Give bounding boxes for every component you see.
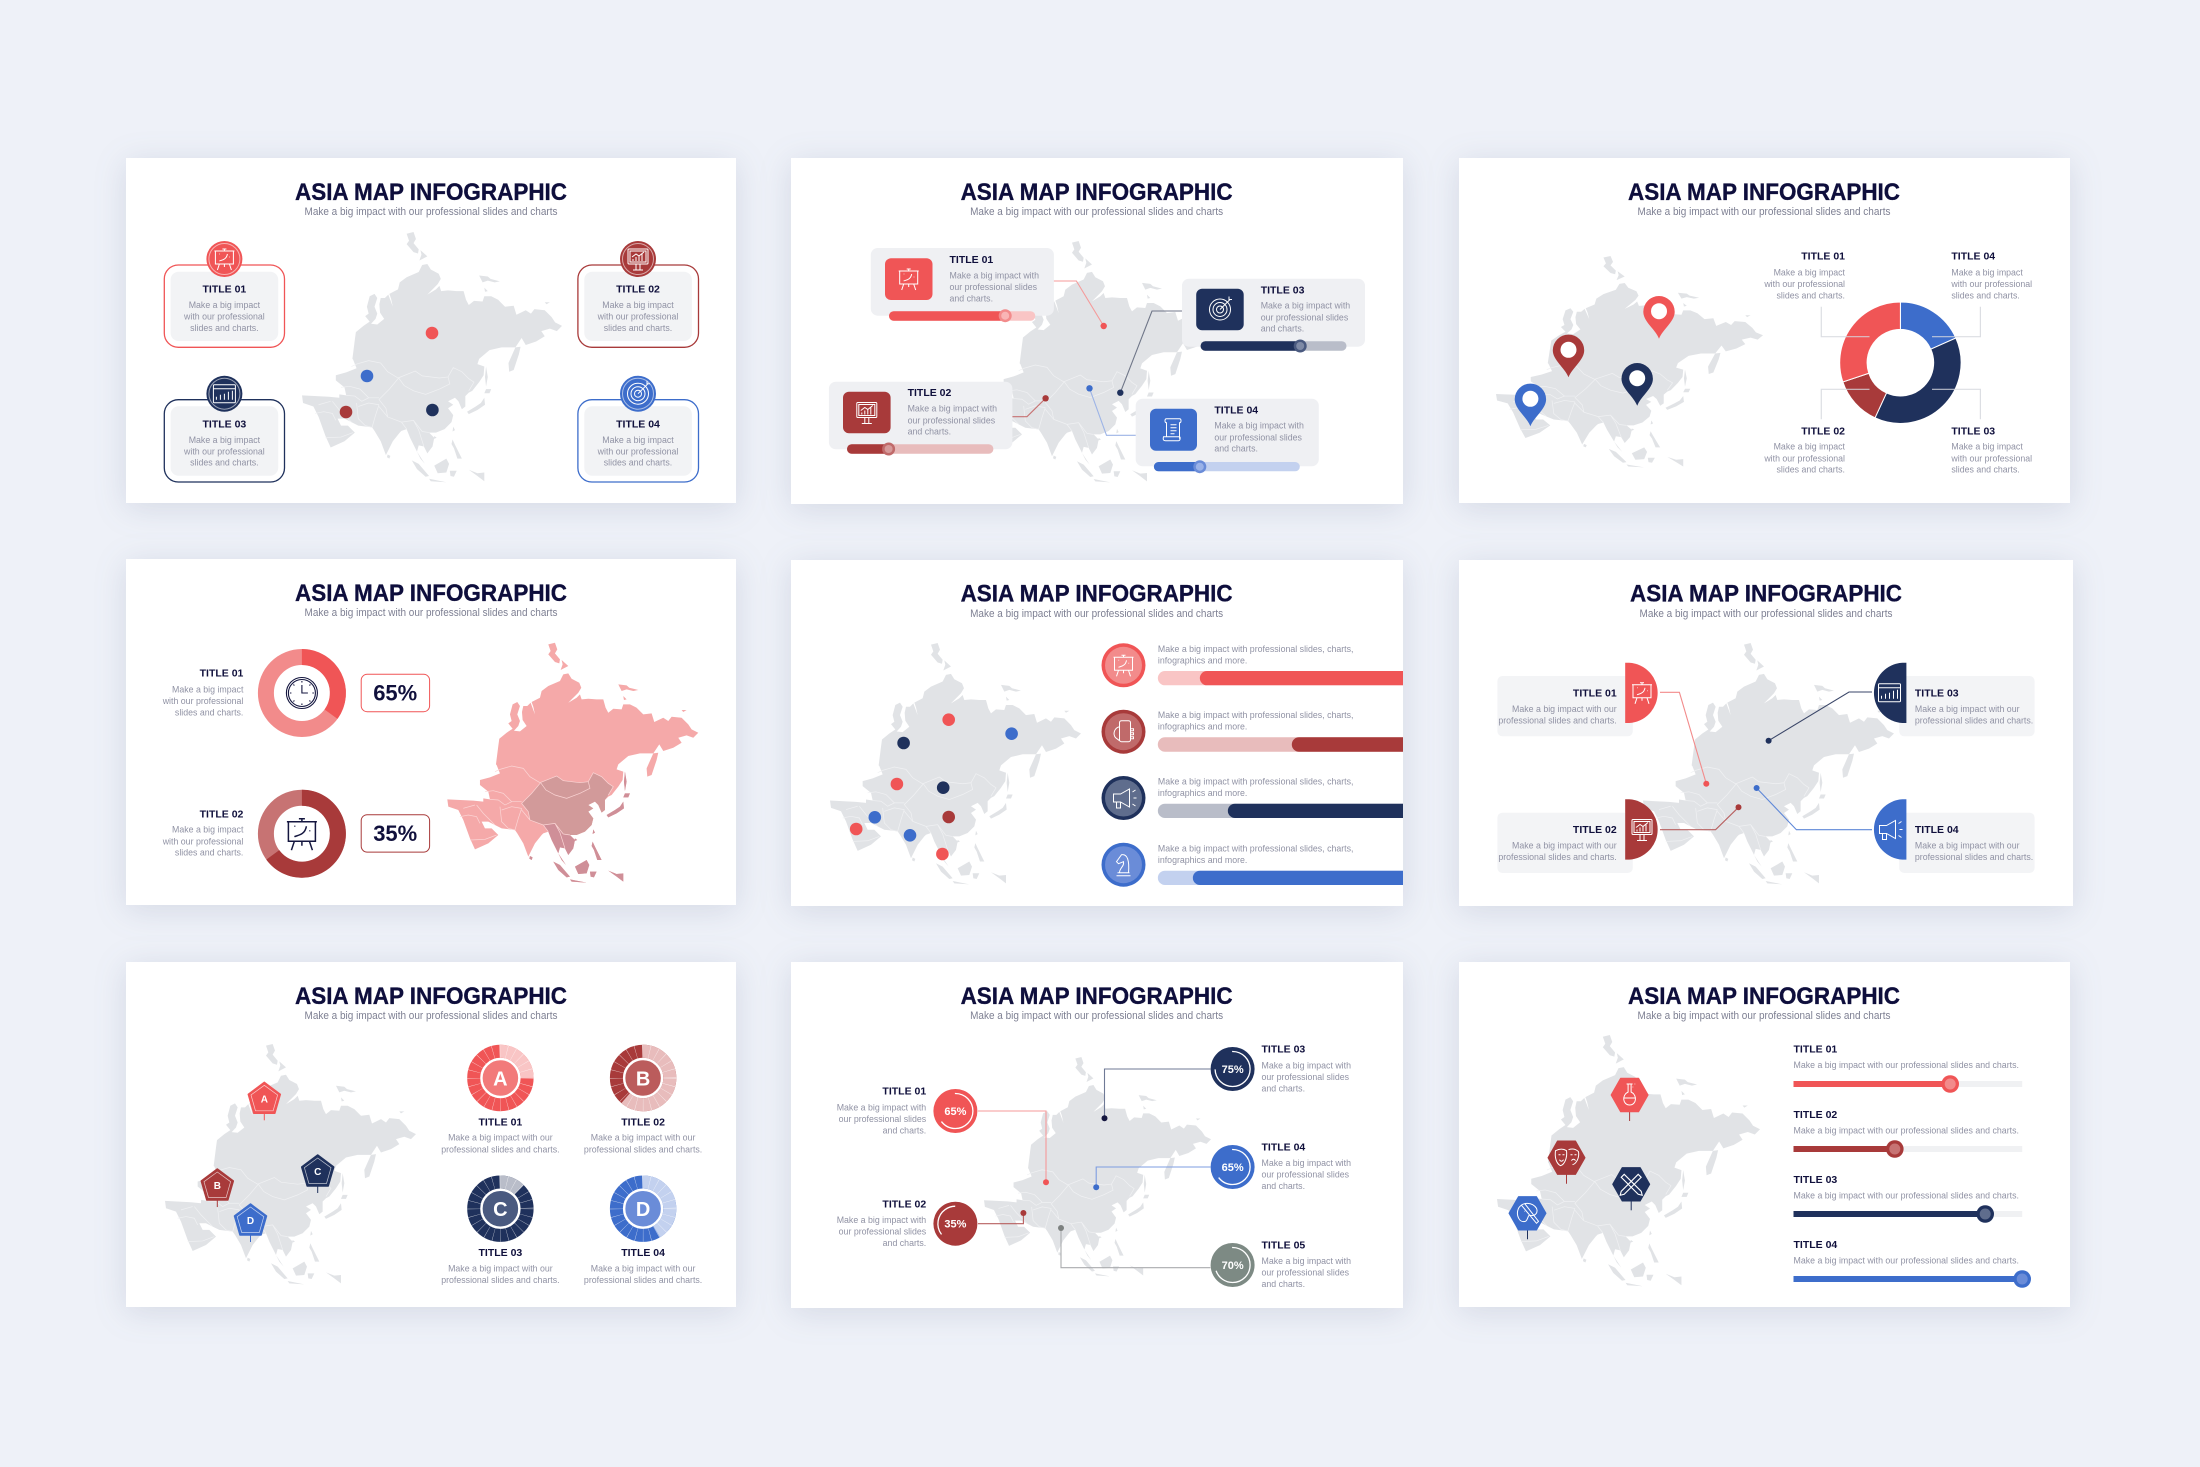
card: title 04: [1136, 399, 1319, 473]
text: title 02: TITLE 02: [200, 808, 244, 820]
text: title 01: [1763, 251, 1846, 300]
pentagon marker B: [201, 1169, 233, 1207]
callout 35 percent: and charts.: [883, 1238, 926, 1248]
card: title 04: our professional slides: [1214, 432, 1303, 442]
card: title 01: TITLE 01: [203, 284, 246, 296]
callout: title 04: professional slides and charts.: [1915, 852, 2033, 862]
text: title 01: TITLE 01: [1801, 251, 1845, 263]
callout 65 percent: and charts.: [883, 1125, 926, 1135]
text: title 01: [162, 668, 244, 717]
text: title 04: TITLE 04: [621, 1247, 665, 1259]
callout 65 percent: [837, 1086, 977, 1135]
text: title 03: slides and charts.: [1951, 465, 2020, 475]
heading: [1630, 582, 1902, 620]
pentagon marker D: [234, 1204, 266, 1242]
heading: Make a big impact with our professional slides and charts: [970, 608, 1224, 620]
panel 6: map with half-circle callouts: [1459, 560, 2073, 906]
card: title 02: [578, 241, 698, 347]
heading: [1628, 984, 1900, 1022]
heading: Make a big impact with our professional slides and charts: [970, 206, 1224, 218]
row 1: infographics and more.: [1158, 656, 1247, 666]
text: title 02: [584, 1116, 702, 1154]
panel 3: map with pins and donut chart: [1459, 158, 2070, 503]
radial gauge A: [474, 1051, 527, 1105]
card: title 03: with our professional: [183, 446, 265, 456]
card: title 03: [1182, 279, 1365, 352]
text: title 04: with our professional: [1950, 279, 2032, 289]
slider: title 04: Make a big impact with our professional slides and charts.: [1794, 1255, 2019, 1265]
text: title 02: with our professional: [1763, 453, 1845, 463]
asia map: [302, 232, 562, 482]
row 4: [1102, 843, 1403, 887]
card: title 02: and charts.: [908, 427, 951, 437]
text: title 04: Make a big impact: [1951, 267, 2023, 277]
slider: title 02: Make a big impact with our professional slides and charts.: [1794, 1125, 2019, 1135]
text: title 02: TITLE 02: [1801, 425, 1845, 437]
heading: [961, 984, 1233, 1022]
panel 4: pink map with percentage donuts: [126, 559, 736, 905]
hexagon marker: masks: [1548, 1141, 1585, 1184]
callout 65 percent blue: 65%: [1222, 1162, 1244, 1174]
pentagon marker A: A: [261, 1094, 268, 1105]
callout 65 percent blue: and charts.: [1262, 1181, 1305, 1191]
panel 7: map with pentagon markers and radial gauges: [126, 962, 736, 1307]
card: title 03: [164, 376, 284, 482]
callout 35 percent: TITLE 02: [882, 1198, 926, 1210]
card: title 03: Make a big impact: [189, 435, 261, 445]
connector lines and dots: [1011, 281, 1183, 435]
card: title 02: Make a big impact with: [908, 404, 997, 414]
callout 75 percent: and charts.: [1262, 1083, 1305, 1093]
row 3: Make a big impact with professional slides, charts,: [1158, 776, 1353, 786]
card: title 04: with our professional: [597, 446, 678, 456]
callout 70 percent: [1211, 1239, 1351, 1289]
text: title 03: [441, 1247, 560, 1285]
text: title 02: slides and charts.: [1777, 465, 1845, 475]
donut leader lines: [1821, 307, 1980, 419]
pentagon marker A: [248, 1082, 280, 1120]
pentagon marker B: B: [214, 1181, 221, 1192]
slider: title 04: TITLE 04: [1794, 1239, 1837, 1251]
slider: title 02: TITLE 02: [1794, 1109, 1837, 1121]
text: title 03: TITLE 03: [1951, 425, 1995, 437]
heading: ASIA MAP INFOGRAPHIC: [961, 180, 1233, 206]
radial gauge D: [616, 1182, 670, 1235]
slider: title 02: [1794, 1109, 2022, 1158]
callout: title 02: professional slides and charts.: [1498, 852, 1617, 862]
card: title 01: Make a big impact: [189, 300, 261, 310]
callout 35 percent: 35%: [944, 1219, 967, 1231]
callout 70 percent: and charts.: [1262, 1279, 1305, 1289]
panel 2: map with slider cards: [791, 158, 1403, 504]
card: title 01: and charts.: [950, 293, 993, 303]
callout 65 percent blue: TITLE 04: [1262, 1142, 1305, 1154]
slider: title 04: [1794, 1239, 2031, 1288]
text: title 03: Make a big impact with our: [448, 1263, 553, 1273]
card: title 03: Make a big impact with: [1261, 301, 1350, 311]
donut 65 percent: [266, 649, 346, 729]
card: title 02: with our professional: [597, 311, 678, 321]
card: title 04: [578, 376, 698, 482]
text: title 01: with our professional: [1763, 279, 1845, 289]
heading: [1628, 180, 1900, 218]
callout: title 04: Make a big impact with our: [1915, 841, 2020, 851]
row 3: infographics and more.: [1158, 788, 1247, 798]
pentagon marker C: [302, 1155, 334, 1193]
callout 75 percent: our professional slides: [1262, 1072, 1350, 1082]
asia map: [984, 1057, 1211, 1276]
card: title 01: Make a big impact with: [950, 270, 1039, 280]
card: title 04: Make a big impact: [602, 435, 674, 445]
callout: title 03: professional slides and charts.: [1915, 716, 2033, 726]
row 4: Make a big impact with professional slides, charts,: [1158, 843, 1353, 853]
card: title 04: slides and charts.: [604, 458, 672, 468]
card: title 02: slides and charts.: [604, 323, 672, 333]
callout: title 02: TITLE 02: [1573, 824, 1617, 836]
panel 1: map with four title cards: [126, 158, 736, 503]
callout: title 03: TITLE 03: [1915, 687, 1959, 699]
heading: [295, 180, 567, 218]
text: title 03: TITLE 03: [479, 1247, 522, 1259]
callout: title 04: TITLE 04: [1915, 824, 1959, 836]
value box 65 percent: 65%: [373, 681, 417, 706]
slider: title 03: [1794, 1174, 2022, 1223]
card: title 03: our professional slides: [1261, 312, 1349, 322]
text: title 04: Make a big impact with our: [591, 1263, 695, 1273]
panel 9: map with hexagon markers and sliders: [1459, 962, 2070, 1307]
heading: Make a big impact with our professional slides and charts: [304, 206, 558, 218]
heading: ASIA MAP INFOGRAPHIC: [295, 581, 567, 607]
asia map: [971, 241, 1222, 482]
heading: [961, 180, 1233, 218]
text: title 02: [1763, 425, 1846, 475]
callout 65 percent: Make a big impact with: [837, 1102, 926, 1112]
row 2: [1102, 710, 1403, 754]
map dots: [850, 713, 1018, 860]
asia map: [1643, 643, 1894, 884]
slider: title 03: TITLE 03: [1794, 1174, 1837, 1186]
heading: Make a big impact with our professional slides and charts: [1638, 1010, 1891, 1022]
card: title 04: Make a big impact with: [1214, 421, 1304, 431]
callout: title 01: professional slides and charts.: [1498, 716, 1617, 726]
pentagon marker D: D: [247, 1216, 254, 1227]
callout: title 02: [1497, 799, 1658, 873]
callout 70 percent: TITLE 05: [1262, 1239, 1305, 1251]
hexagon marker: pencils: [1613, 1168, 1650, 1210]
heading: ASIA MAP INFOGRAPHIC: [295, 984, 567, 1010]
asia map: [830, 643, 1081, 884]
card: title 01: [871, 248, 1054, 322]
text: title 01: with our professional: [162, 696, 243, 706]
connector lines and dots: [1660, 692, 1872, 830]
text: title 01: slides and charts.: [1777, 290, 1845, 300]
panel 5: map with dots and progress rows: [791, 560, 1403, 906]
value box 35 percent: 35%: [373, 821, 417, 846]
card: title 01: our professional slides: [950, 282, 1038, 292]
heading: ASIA MAP INFOGRAPHIC: [1628, 984, 1900, 1010]
hexagon marker: palette: [1509, 1197, 1546, 1239]
radial gauge B: [616, 1051, 670, 1105]
text: title 01: TITLE 01: [200, 668, 244, 680]
card: title 04: TITLE 04: [1214, 404, 1258, 416]
text: title 04: [1950, 251, 2032, 300]
map pins: [1515, 296, 1675, 426]
card: title 03: and charts.: [1261, 324, 1304, 334]
map dots: [340, 327, 439, 418]
text: title 02: Make a big impact: [172, 825, 244, 835]
heading: Make a big impact with our professional slides and charts: [304, 1010, 558, 1022]
slider: title 03: Make a big impact with our professional slides and charts.: [1794, 1190, 2019, 1200]
heading: [961, 582, 1233, 620]
callout 35 percent: our professional slides: [839, 1227, 927, 1237]
text: title 02: slides and charts.: [175, 848, 243, 858]
text: title 02: Make a big impact with our: [591, 1133, 695, 1143]
panel 8: map with percentage callouts: [791, 962, 1403, 1308]
text: title 02: TITLE 02: [621, 1116, 665, 1128]
callout 70 percent: 70%: [1222, 1260, 1244, 1272]
callout 65 percent: our professional slides: [839, 1114, 927, 1124]
connector lines and dots: [978, 1069, 1210, 1268]
slider: title 01: Make a big impact with our professional slides and charts.: [1794, 1060, 2019, 1070]
text: title 01: Make a big impact with our: [448, 1133, 553, 1143]
card: title 02: our professional slides: [908, 415, 996, 425]
row 2: Make a big impact with professional slides, charts,: [1158, 710, 1353, 720]
heading: ASIA MAP INFOGRAPHIC: [1628, 180, 1900, 206]
callout: title 04: [1874, 799, 2035, 873]
card: title 01: with our professional: [183, 311, 265, 321]
text: title 01: [441, 1116, 560, 1154]
card: title 03: TITLE 03: [203, 419, 246, 431]
radial gauge A: A: [493, 1068, 508, 1090]
slider: title 01: [1794, 1044, 2022, 1093]
text: title 04: TITLE 04: [1951, 251, 1995, 263]
text: title 04: [584, 1247, 702, 1285]
text: title 02: with our professional: [162, 836, 243, 846]
text: title 03: [1950, 425, 2032, 475]
donut chart: [1840, 302, 1961, 423]
callout 75 percent: TITLE 03: [1262, 1044, 1305, 1056]
heading: [295, 984, 567, 1022]
text: title 04: slides and charts.: [1951, 290, 2020, 300]
callout: title 03: Make a big impact with our: [1915, 704, 2020, 714]
text: title 01: Make a big impact: [172, 684, 244, 694]
card: title 03: slides and charts.: [190, 458, 259, 468]
card: title 04: and charts.: [1214, 444, 1258, 454]
text: title 02: [162, 808, 244, 858]
callout 35 percent: Make a big impact with: [837, 1215, 926, 1225]
callout: title 03: [1874, 663, 2035, 736]
callout: title 01: TITLE 01: [1573, 687, 1617, 699]
card: title 02: [829, 382, 1012, 456]
heading: Make a big impact with our professional slides and charts: [1640, 608, 1893, 620]
callout 65 percent blue: our professional slides: [1262, 1170, 1350, 1180]
asia map: [1497, 1035, 1760, 1286]
asia map: [1496, 256, 1763, 467]
pentagon marker C: C: [314, 1167, 321, 1178]
card: title 01: TITLE 01: [950, 254, 993, 266]
radial gauge C: C: [493, 1199, 508, 1221]
heading: ASIA MAP INFOGRAPHIC: [1630, 582, 1902, 608]
text: title 03: Make a big impact: [1951, 442, 2023, 452]
text: title 01: Make a big impact: [1774, 267, 1846, 277]
heading: ASIA MAP INFOGRAPHIC: [961, 984, 1233, 1010]
radial gauge C: [474, 1182, 527, 1235]
callout 65 percent: TITLE 01: [882, 1086, 926, 1098]
text: title 02: Make a big impact: [1774, 442, 1846, 452]
radial gauge D: D: [636, 1199, 650, 1221]
card: title 02: TITLE 02: [616, 284, 660, 296]
callout: title 01: [1497, 663, 1658, 736]
heading: Make a big impact with our professional slides and charts: [970, 1010, 1224, 1022]
callout 65 percent blue: Make a big impact with: [1262, 1158, 1351, 1168]
heading: [295, 581, 567, 619]
row 4: infographics and more.: [1158, 855, 1247, 865]
heading: ASIA MAP INFOGRAPHIC: [961, 582, 1233, 608]
row 1: [1102, 643, 1403, 687]
callout 75 percent: 75%: [1222, 1064, 1244, 1076]
text: title 01: professional slides and charts.: [441, 1144, 560, 1154]
value box 65 percent: [361, 674, 430, 712]
text: title 03: professional slides and charts.: [441, 1275, 560, 1285]
card: title 01: slides and charts.: [190, 323, 259, 333]
text: title 04: professional slides and charts.: [584, 1275, 702, 1285]
callout 65 percent blue: [1211, 1142, 1351, 1191]
row 3: [1102, 776, 1403, 820]
asia map: [165, 1044, 416, 1284]
card: title 04: TITLE 04: [616, 419, 660, 431]
card: title 02: TITLE 02: [908, 387, 952, 399]
callout 75 percent: Make a big impact with: [1262, 1060, 1351, 1070]
donut 35 percent: [266, 790, 346, 878]
callout 75 percent: [1211, 1044, 1351, 1093]
callout: title 01: Make a big impact with our: [1512, 704, 1617, 714]
radial gauge B: B: [636, 1068, 650, 1090]
card: title 01: [164, 241, 284, 347]
callout: title 02: Make a big impact with our: [1512, 841, 1617, 851]
callout 70 percent: our professional slides: [1262, 1268, 1350, 1278]
hexagon marker: flask: [1611, 1078, 1648, 1121]
text: title 01: slides and charts.: [175, 707, 243, 717]
pink asia map: [447, 643, 698, 883]
row 2: infographics and more.: [1158, 722, 1247, 732]
text: title 02: professional slides and charts.: [584, 1144, 702, 1154]
heading: Make a big impact with our professional slides and charts: [304, 607, 558, 619]
callout 65 percent: 65%: [944, 1106, 967, 1118]
callout 35 percent: [837, 1198, 980, 1248]
slider: title 01: TITLE 01: [1794, 1044, 1837, 1056]
row 1: Make a big impact with professional slides, charts,: [1158, 644, 1353, 654]
heading: Make a big impact with our professional slides and charts: [1638, 206, 1891, 218]
card: title 03: TITLE 03: [1261, 284, 1305, 296]
text: title 01: TITLE 01: [479, 1116, 522, 1128]
value box 35 percent: [361, 815, 430, 852]
card: title 02: Make a big impact: [602, 300, 674, 310]
callout 70 percent: Make a big impact with: [1262, 1256, 1351, 1266]
text: title 03: with our professional: [1950, 453, 2032, 463]
heading: ASIA MAP INFOGRAPHIC: [295, 180, 567, 206]
